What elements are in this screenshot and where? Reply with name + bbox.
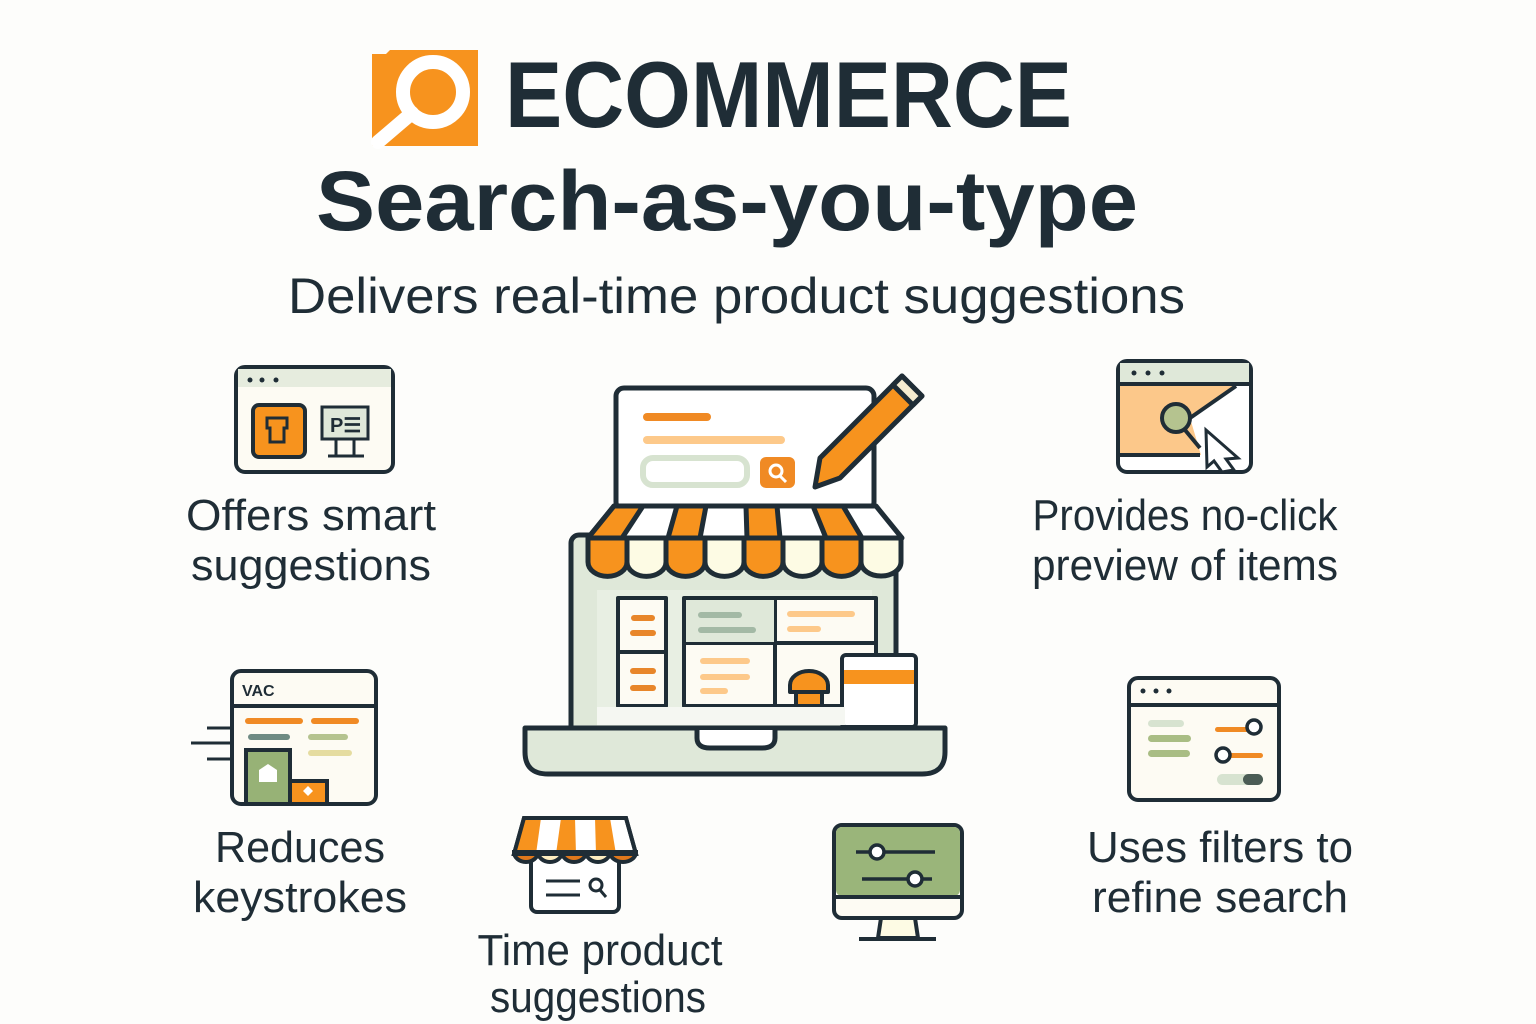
- label: offers smart suggestions: Offers smart: [186, 491, 436, 540]
- icon: small storefront: [514, 818, 636, 912]
- label: filters: [1087, 823, 1353, 922]
- label: time product suggestions: suggestions: [490, 973, 706, 1022]
- subtitle: Delivers real-time product suggestions: [288, 268, 1185, 324]
- title: ECOMMERCE: ECOMMERCE: [505, 42, 1072, 147]
- icon: monitor with sliders: [834, 825, 962, 939]
- icon: smart suggestions browser: P☰: [330, 415, 361, 437]
- label: reduces keystrokes: [193, 823, 407, 922]
- label: no-click preview: preview of items: [1032, 541, 1338, 590]
- label: reduces keystrokes: keystrokes: [193, 873, 407, 922]
- label: offers smart suggestions: suggestions: [191, 541, 431, 590]
- icon: filters browser: [1129, 678, 1279, 800]
- icon: smart suggestions browser: [236, 367, 393, 472]
- label: no-click preview: [1032, 491, 1338, 590]
- label: no-click preview: Provides no-click: [1032, 491, 1338, 540]
- label: time product suggestions: Time product: [478, 926, 722, 975]
- title: Search-as-you-type: Search-as-you-type: [316, 154, 1138, 248]
- icon: no-click preview: [1118, 361, 1251, 472]
- label: reduces keystrokes: Reduces: [215, 823, 385, 872]
- central illustration: laptop storefront: [525, 376, 945, 774]
- label: offers smart suggestions: [186, 491, 436, 590]
- label: time product suggestions: [478, 926, 722, 1022]
- label: filters: refine search: [1092, 873, 1348, 922]
- label: filters: Uses filters to: [1087, 823, 1353, 872]
- icon: reduces keystrokes: VAC: [242, 683, 275, 700]
- logo icon: [372, 50, 478, 146]
- icon: reduces keystrokes: [191, 671, 376, 804]
